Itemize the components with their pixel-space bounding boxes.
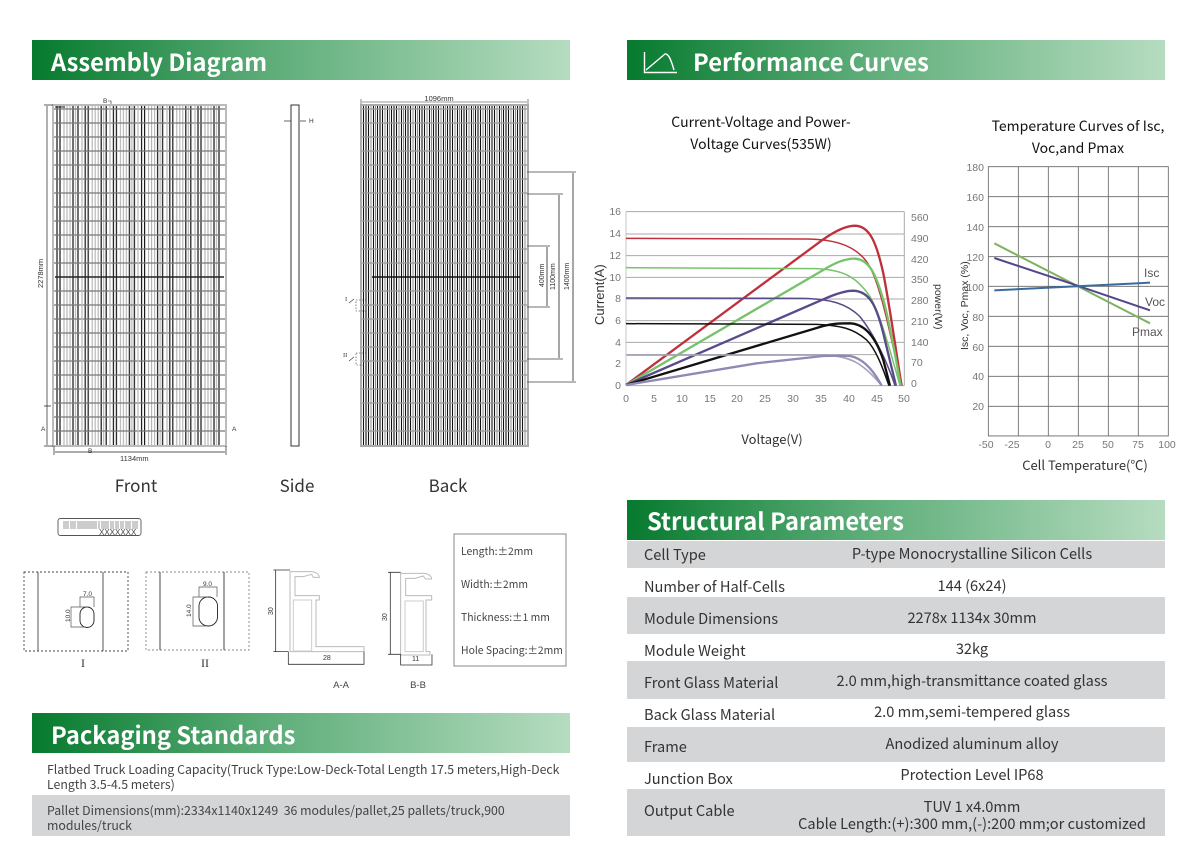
axis: power ticks: 280 [911,295,929,307]
heading: Packaging Standards [32,713,570,753]
row: frame: Anodized aluminum alloy [885,733,1059,754]
axis: voltage ticks: 0 [623,393,629,405]
detail: mounting hole I: I [81,656,85,670]
row: junction box: Junction Box [644,768,734,789]
text: truck loading capacity: Flatbed Truck Loading Capacity(Truck Type:Low-Deck-Total Length 17.5 meters,High-Deck [47,760,560,778]
detail: frame section B-B: B-B [410,680,426,691]
axis: voltage ticks: 15 [704,393,716,405]
drawing: back view: 1400mm [564,263,571,290]
axis: voltage ticks: 35 [815,393,827,405]
axis: power ticks: 0 [911,378,917,390]
drawing: back view: 1100mm [550,263,557,290]
text: pallet dimensions: modules/truck [47,816,132,834]
axis: percent ticks: 180 [966,162,984,174]
drawing: back view: I [345,296,347,303]
drawing: back view: II [343,352,347,359]
axis: power ticks: 490 [911,233,929,245]
chart title: temperature curves: Temperature Curves of Isc, [992,116,1165,136]
row: junction box [644,764,1044,789]
line label: Isc: Isc [1144,266,1159,280]
axis: voltage ticks [623,393,910,405]
axis label: Isc, Voc, Pmax (%): Isc, Voc, Pmax (%) [959,261,971,350]
icon: barcode label: XXXXXXX [99,528,137,537]
drawing: back view: 1096mm [424,94,454,103]
text: truck loading capacity: Length 3.5-4.5 meters) [47,775,175,793]
heading: Packaging Standards: Packaging Standards [51,717,295,751]
heading: Structural Parameters: Structural Parameters [647,503,904,537]
axis: percent ticks: 140 [966,222,984,234]
text: pallet dimensions: Pallet Dimensions(mm):2334x1140x1249 36 modules/pallet,25 pallets/truck,900 [47,801,505,819]
chart title: I-V curves: Current-Voltage and Power- [671,112,851,132]
caption: Front: Front [115,472,158,497]
axis: power ticks: 140 [911,337,929,349]
line label: Voc: Voc [1145,295,1165,309]
row: dimensions [644,607,1037,629]
axis: power ticks: 560 [911,212,929,224]
row: junction box: Protection Level IP68 [900,764,1044,785]
axis: temperature ticks: 25 [1072,439,1084,451]
drawing: front view: A [41,426,46,433]
detail: frame section A-A: A-A [333,680,350,691]
axis label: Voltage(V): Voltage(V) [741,429,803,448]
caption: Back: Back [429,472,468,497]
axis: current ticks: 4 [615,337,621,349]
row: frame [644,733,1059,757]
icon: barcode label [58,518,141,537]
line label: Pmax: Pmax [1132,325,1163,339]
axis: current ticks: 6 [615,315,621,327]
row: front glass: Front Glass Material [644,672,778,693]
axis label: Current(A): Current(A) [592,264,607,325]
row: half-cells: Number of Half-Cells [644,576,785,597]
axis: percent ticks: 160 [966,192,984,204]
drawing: side view [284,105,314,446]
table: structural parameters [627,541,1165,836]
row: back glass: 2.0 mm,semi-tempered glass [874,701,1070,722]
heading: Performance Curves: Performance Curves [693,44,929,78]
axis: percent ticks: 120 [966,252,984,264]
row: cell type [644,543,1092,565]
panel: packaging text [32,760,570,836]
row: dimensions: Module Dimensions [644,608,778,629]
panel: tolerance box: Hole Spacing:±2mm [461,642,563,657]
heading: Assembly Diagram: Assembly Diagram [50,44,267,78]
chart title: temperature curves [992,116,1165,158]
axis: current ticks: 2 [615,358,621,370]
caption: Side: Side [280,472,314,497]
axis: power ticks: 210 [911,316,929,328]
drawing: front view: B [103,98,107,105]
heading: Structural Parameters [627,500,1165,540]
axis: temperature ticks: 50 [1102,439,1114,451]
axis: power ticks: 420 [911,254,929,266]
axis: current ticks: 12 [609,250,621,262]
detail: frame section A-A [268,570,364,691]
axis: power ticks: 70 [911,357,923,369]
axis label: Cell Temperature: Cell Temperature(℃) [1022,455,1148,474]
axis: voltage ticks: 30 [787,393,799,405]
heading: Performance Curves [627,40,1165,80]
axis: temperature ticks: 100 [1158,439,1176,451]
detail: mounting hole II: II [201,656,209,670]
chart title: I-V curves [671,112,851,154]
axis: current ticks: 0 [615,380,621,392]
row: half-cells: 144 (6x24) [938,575,1006,596]
row: cell type: Cell Type [644,544,706,565]
axis: voltage ticks: 50 [898,393,910,405]
axis: percent ticks: 80 [972,312,984,324]
row: half-cells [644,575,1006,597]
drawing: front view: B [88,448,92,455]
axis: current ticks: 16 [609,206,621,218]
chart: current-voltage and power-voltage curves [592,206,944,448]
drawing: front view: 1134mm [120,454,149,463]
axis: percent ticks: 20 [972,401,984,413]
axis: voltage ticks: 25 [759,393,771,405]
axis: current ticks [609,206,621,392]
drawing: front view: 2278mm [36,259,45,288]
axis: percent ticks: 100 [966,282,984,294]
chart title: I-V curves: Voltage Curves(535W) [690,134,832,154]
axis: voltage ticks: 45 [871,393,883,405]
detail: mounting hole I: 10.0 [65,609,72,622]
axis: current ticks: 8 [615,293,621,305]
panel: tolerance box [454,534,566,666]
row: weight: Module Weight [644,640,746,661]
row: weight: 32kg [956,638,989,659]
drawing: front view: A [232,426,237,433]
text: pallet dimensions [47,801,505,834]
detail: mounting hole II [146,572,249,670]
axis: temperature ticks [978,439,1176,451]
chart title: temperature curves: Voc,and Pmax [1032,138,1124,158]
detail: frame section A-A: 28 [323,655,331,662]
axis: percent ticks: 40 [972,371,984,383]
drawing: back view: 400mm [539,263,546,287]
row: back glass: Back Glass Material [644,704,775,725]
axis: power ticks: 350 [911,274,929,286]
axis: temperature ticks: 75 [1132,439,1144,451]
panel: tolerance box: Width:±2mm [461,576,528,591]
row: weight [644,638,989,661]
row: frame: Frame [644,736,687,757]
panel: assembly drawings [36,94,576,463]
axis: percent ticks: 60 [972,342,984,354]
row: output cable: TUV 1 x4.0mm [924,796,1020,817]
row: front glass: 2.0 mm,high-transmittance coated glass [836,670,1108,691]
axis: current ticks: 10 [609,272,621,284]
detail: frame section A-A: 30 [268,607,275,615]
text: truck loading capacity [47,760,560,793]
detail: frame section B-B [382,572,432,691]
axis: voltage ticks: 10 [676,393,688,405]
row: back glass [644,701,1070,725]
axis: temperature ticks: 0 [1045,439,1051,451]
axis: voltage ticks: 20 [731,393,743,405]
detail: mounting hole II: 14.0 [186,604,193,617]
icon: curve chart [644,52,677,72]
panel: tolerance box: Thickness:±1 mm [461,609,550,624]
row: output cable [644,796,1146,834]
axis: current ticks: 14 [609,228,621,240]
drawing: front view [36,98,237,463]
axis: power ticks [911,212,929,390]
panel: tolerance box: Length:±2mm [461,543,533,558]
axis: percent ticks [966,162,984,413]
row: output cable: Output Cable [644,800,735,821]
detail: mounting hole II: 9.0 [203,581,212,588]
chart: temperature curves [959,162,1176,474]
axis: temperature ticks: -25 [1004,439,1020,451]
axis label: power(W): power(W) [932,284,944,330]
axis: temperature ticks: -50 [978,439,994,451]
detail: frame section B-B: 30 [382,613,389,621]
detail: frame section B-B: 11 [412,656,419,663]
axis: voltage ticks: 40 [843,393,855,405]
heading: Assembly Diagram [32,40,570,80]
detail: mounting hole I [24,572,128,670]
detail: mounting hole I: 7.0 [83,591,92,598]
drawing: side view: H [309,118,314,125]
axis: voltage ticks: 5 [651,393,657,405]
row: front glass [644,670,1108,693]
row: dimensions: 2278x 1134x 30mm [907,607,1037,628]
drawing: back view [343,94,576,446]
row: cell type: P-type Monocrystalline Silicon Cells [852,543,1092,564]
row: output cable: Cable Length:(+):300 mm,(-):200 mm;or customized [798,813,1146,834]
